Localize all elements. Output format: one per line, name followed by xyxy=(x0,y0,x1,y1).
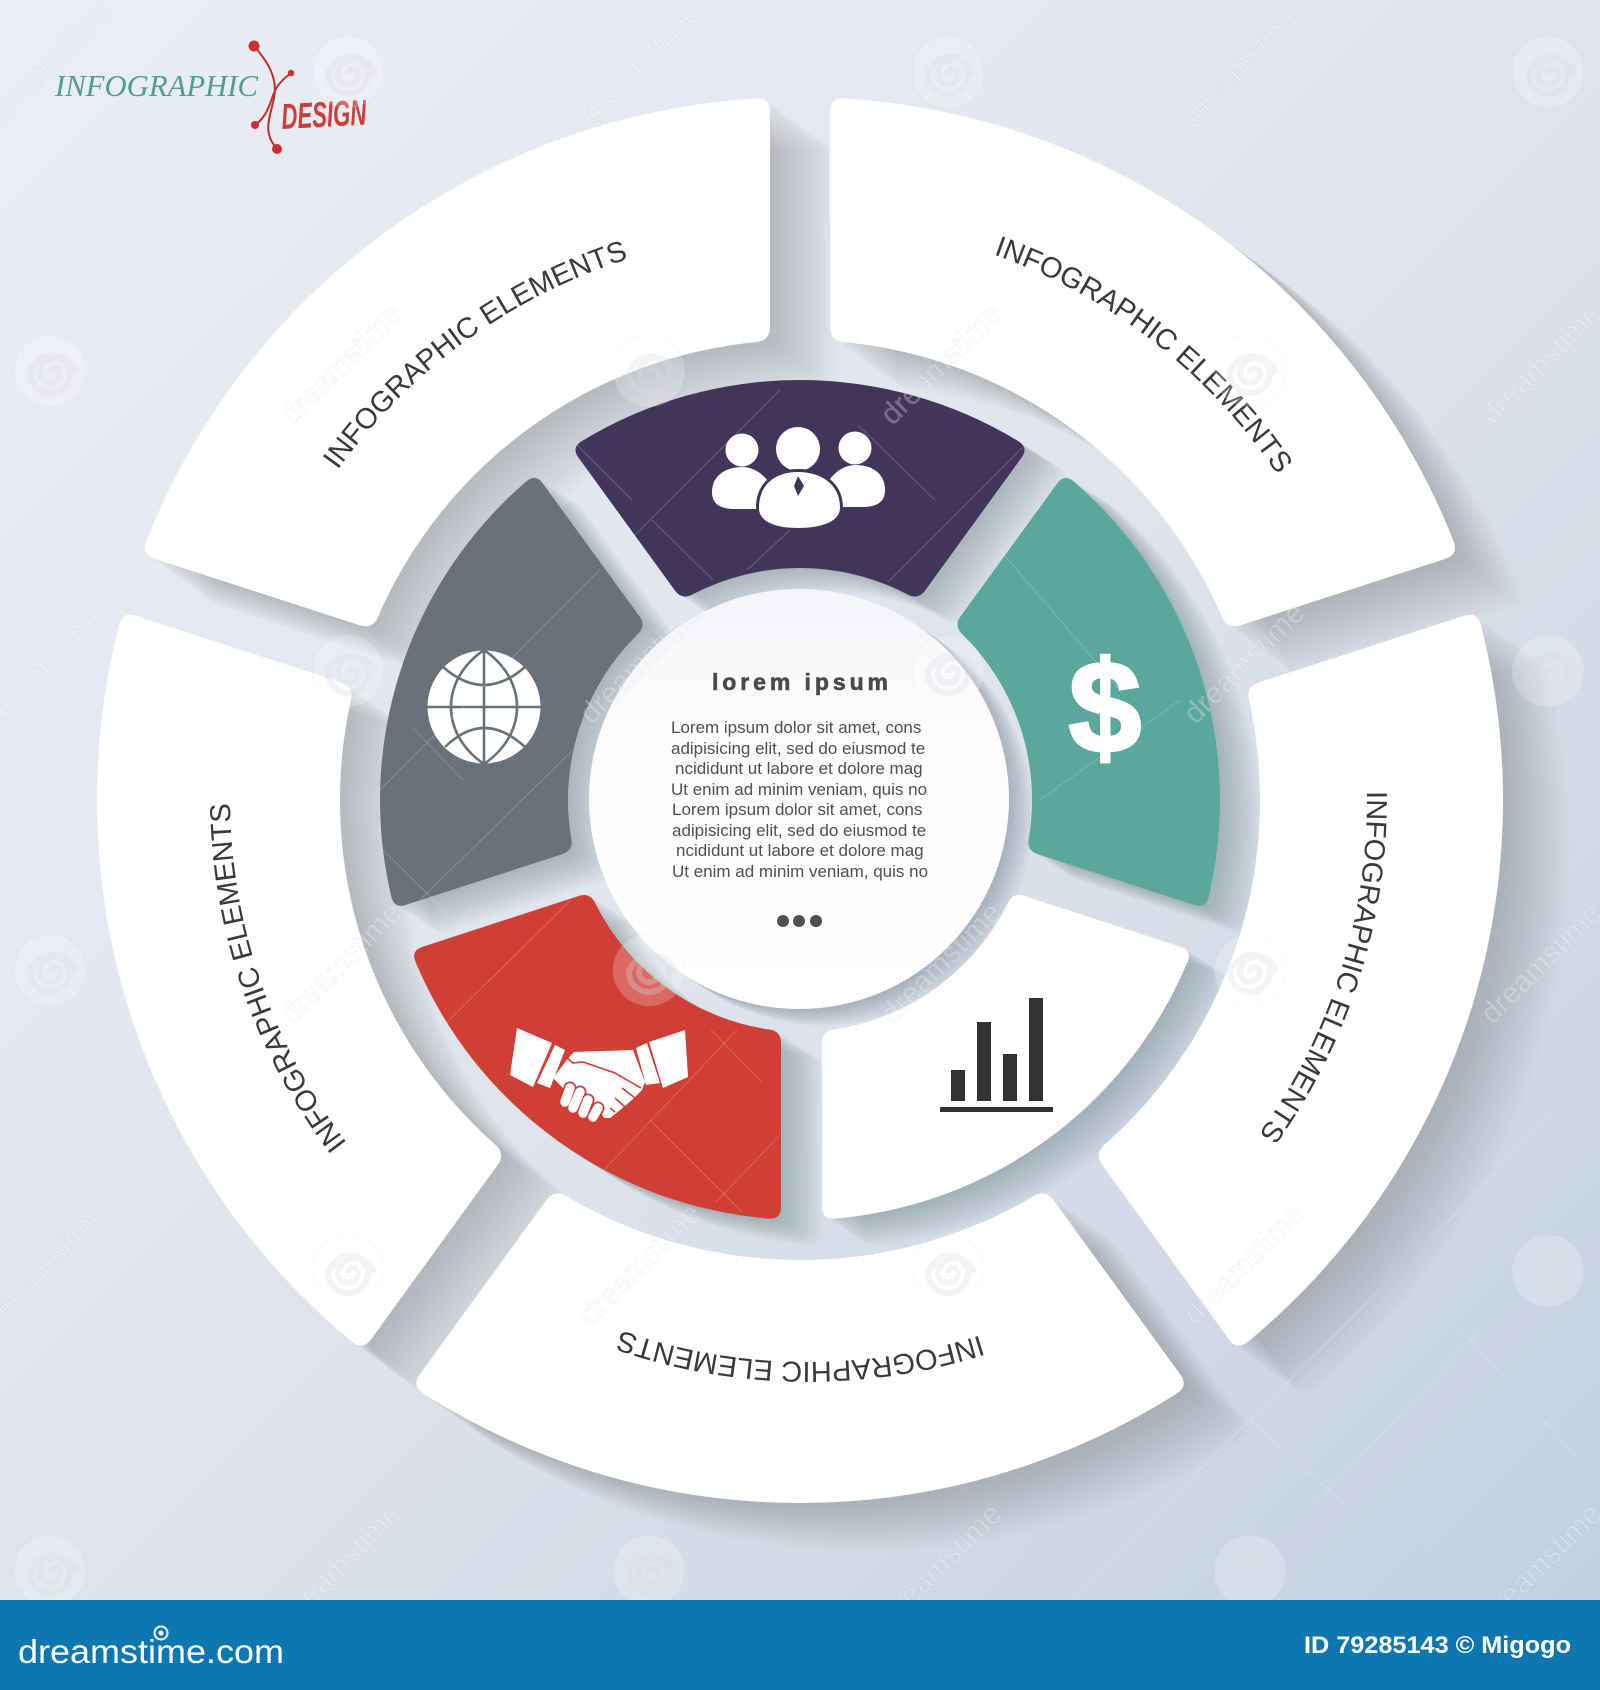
panel: outer top left xyxy=(76,6,879,707)
icon: bar chart xyxy=(940,998,1053,1112)
panel: white chart xyxy=(738,833,1229,1272)
logo: DESIGN xyxy=(280,92,368,137)
watermark text: dreamstime xyxy=(573,0,707,130)
panel: outer right xyxy=(1056,557,1587,1382)
centre body text: Ut enim ad minim veniam, quis no xyxy=(672,862,928,881)
panel: outer bottom xyxy=(416,1193,1184,1503)
icon: dollar sign: $ xyxy=(1069,634,1141,780)
panel: red partnership xyxy=(374,833,865,1272)
centre body text: Lorem ipsum dolor sit amet, cons xyxy=(671,718,921,737)
centre body text: adipisicing elit, sed do eiusmod te xyxy=(672,821,926,840)
logo: INFOGRAPHIC xyxy=(54,69,259,103)
panel: purple team xyxy=(575,380,1025,597)
watermark text: dreamstime xyxy=(274,896,408,1030)
logo xyxy=(54,40,368,154)
icon: globe xyxy=(427,650,541,764)
inner ring of five coloured panels xyxy=(331,380,1269,1272)
panel: outer top right xyxy=(721,6,1524,707)
watermark text: dreamstime xyxy=(1177,596,1311,730)
watermark text: dreamstime xyxy=(1177,1197,1311,1331)
label: bottom panel: INFOGRAPHIC ELEMENTS xyxy=(617,1332,984,1382)
label: left panel: INFOGRAPHIC ELEMENTS xyxy=(210,804,346,1153)
panel: outer left xyxy=(13,557,544,1382)
label: top right panel: INFOGRAPHIC ELEMENTS xyxy=(996,236,1291,472)
watermark text: dreamstime xyxy=(1177,0,1311,130)
long shadow of centre circle xyxy=(592,591,1033,1025)
centre heading: lorem ipsum xyxy=(712,669,888,695)
centre body text: adipisicing elit, sed do eiusmod te xyxy=(671,739,925,758)
centre body text xyxy=(671,718,928,881)
centre body text: Ut enim ad minim veniam, quis no xyxy=(671,780,927,799)
footer logo: dreamstime.com xyxy=(18,1633,284,1670)
centre body text: ncididunt ut labore et dolore mag xyxy=(675,759,923,778)
long shadow of inner ring xyxy=(335,382,1310,1298)
watermark text: dreamstime xyxy=(573,596,707,730)
icon: team of people xyxy=(712,427,885,528)
watermark text: dreamstime xyxy=(274,297,408,431)
panel: grey globe xyxy=(331,457,676,951)
watermark text: dreamstime xyxy=(874,896,1008,1030)
watermark text: dreamstime xyxy=(274,1497,408,1631)
centre body text: Lorem ipsum dolor sit amet, cons xyxy=(672,800,922,819)
three dots xyxy=(777,915,822,927)
centre body text: ncididunt ut labore et dolore mag xyxy=(676,841,924,860)
label: right panel: INFOGRAPHIC ELEMENTS xyxy=(1262,794,1387,1142)
icon: handshake xyxy=(510,1028,688,1118)
watermark text: dreamstime xyxy=(874,297,1008,431)
label: top left panel: INFOGRAPHIC ELEMENTS xyxy=(323,242,626,468)
footer banner xyxy=(0,1600,1600,1690)
watermark lines xyxy=(380,390,1600,1600)
watermark text: dreamstime xyxy=(874,1497,1008,1631)
centre circle xyxy=(589,589,1009,1009)
footer image id: ID 79285143 © Migogo xyxy=(1304,1632,1571,1659)
panel: teal finance xyxy=(924,457,1269,951)
watermark text: dreamstime xyxy=(573,1197,707,1331)
